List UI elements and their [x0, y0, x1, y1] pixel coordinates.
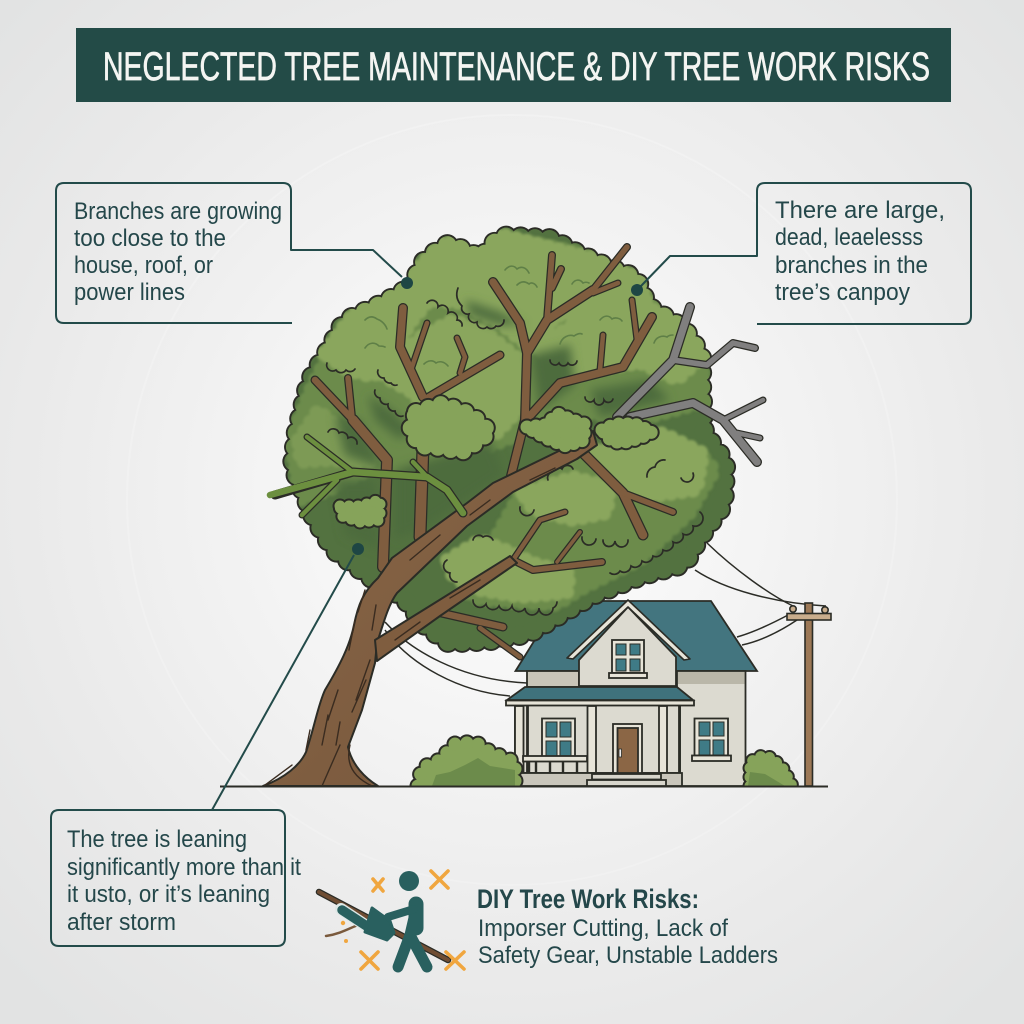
porch roof	[507, 687, 693, 700]
warning crosses	[361, 871, 464, 969]
text: DIY tree work risks: DIY Tree Work Risks:	[477, 884, 699, 914]
sparks	[341, 921, 348, 943]
text: DIY tree work risks: Safety Gear, Unstable Ladders	[478, 942, 778, 969]
power lines	[385, 543, 826, 696]
callout marker	[401, 277, 413, 289]
house	[506, 600, 757, 786]
callout marker	[352, 543, 364, 555]
callout: dead branches: dead, leaelesss	[775, 224, 923, 251]
callout: leaning tree: The tree is leaning	[67, 826, 247, 853]
door	[613, 724, 642, 774]
canopy base	[293, 236, 725, 643]
main roof	[516, 601, 757, 671]
porch columns	[515, 706, 680, 773]
limb fills	[315, 247, 673, 657]
callout marker	[631, 284, 643, 296]
side window	[692, 718, 731, 761]
left upper wall	[527, 671, 579, 687]
gable	[579, 607, 676, 686]
porch wall	[515, 705, 680, 773]
foundation and steps	[515, 773, 682, 786]
callout: dead branches: There are large,	[775, 197, 945, 224]
porch window	[542, 718, 575, 756]
icon: DIY worker with chainsaw	[319, 871, 464, 969]
trunk and main limb	[263, 431, 597, 786]
dead grey branch	[617, 307, 763, 462]
gable window	[609, 640, 647, 678]
callout: branches too close	[56, 183, 413, 323]
foliage marks	[365, 266, 673, 366]
utility pole	[787, 603, 831, 786]
callout: leaning tree: significantly more than it	[67, 854, 301, 881]
text: DIY tree work risks	[477, 884, 778, 969]
callout: leaning tree: after storm	[67, 909, 176, 936]
callout: branches too close: Branches are growing	[74, 198, 282, 225]
porch railing	[523, 756, 587, 773]
callout: dead branches: branches in the	[775, 252, 928, 279]
text: DIY tree work risks: Imporser Cutting, Lack of	[478, 915, 728, 942]
tree	[263, 233, 763, 786]
canopy foliage masses	[290, 233, 715, 605]
chainsaw	[341, 908, 394, 940]
callout: dead branches: tree’s canpoy	[775, 279, 910, 306]
foreground foliage clusters	[340, 404, 652, 522]
bark cracks	[265, 468, 555, 786]
lower limb over trunk	[375, 556, 517, 661]
title banner	[76, 28, 951, 102]
ground line	[220, 786, 828, 788]
green broken branch	[270, 437, 463, 515]
worker figure	[388, 871, 427, 967]
callout: dead branches	[631, 183, 971, 324]
canopy scallop lines	[327, 288, 703, 615]
callout: leaning tree	[51, 543, 364, 946]
bushes	[418, 742, 792, 786]
callout: branches too close: power lines	[74, 279, 185, 306]
log	[319, 892, 448, 960]
callout: branches too close: house, roof, or	[74, 252, 213, 279]
limb outlines	[315, 247, 673, 657]
callout: leaning tree: it usto, or it’s leaning	[67, 881, 270, 908]
right wall	[677, 671, 746, 786]
callout: branches too close: too close to the	[74, 225, 226, 252]
